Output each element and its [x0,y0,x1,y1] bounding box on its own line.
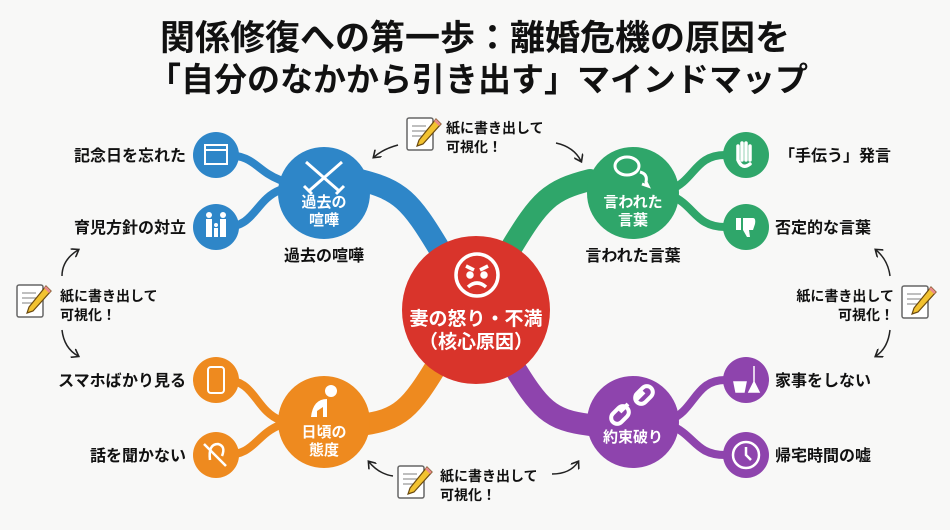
memo: left: 可視化！ [60,307,116,323]
sub-nodes: blue [193,132,239,250]
label: 言われた言葉: 言われた言葉 [585,247,681,265]
node: 言われた言葉: 言葉 [618,212,648,229]
leaf labels: 帰宅時間の嘘 [775,446,871,465]
memo: left [17,250,158,356]
node: 約束破り: 約束破り [603,428,663,446]
memo: left: 紙に書き出して [60,288,158,304]
leaf labels: 家事をしない [775,371,871,390]
sub-nodes: orange [193,357,239,478]
center node [402,236,550,384]
memo: bottom: 可視化！ [440,487,496,503]
icon: slouching person [311,385,337,417]
leaf labels: スマホばかり見る [58,372,186,390]
memo: top: 紙に書き出して [446,120,544,136]
node: 日頃の態度 [278,376,370,468]
leaf labels: 話を聞かない [90,447,186,465]
title: 「自分のなかから引き出す」マインドマップ [148,61,808,98]
memo: bottom [369,462,578,503]
node: 日頃の態度: 態度 [309,441,339,459]
node: 約束破り [587,376,679,468]
icon: speech bubbles [615,157,648,186]
node: 日頃の態度: 日頃の [301,424,347,441]
memo: top [374,118,581,161]
icon: angry face [456,254,498,296]
title: 関係修復への第一歩：離婚危機の原因を [160,19,790,58]
icon: broken chain [609,384,655,426]
branches [225,155,725,455]
memo: top: 可視化！ [446,139,502,155]
label: 過去の喧嘩: 過去の喧嘩 [284,246,364,265]
node: 過去の喧嘩: 喧嘩 [309,211,339,229]
leaf labels: 記念日を忘れた [74,147,186,165]
node: 言われた言葉: 言われた [603,194,663,211]
leaf labels: 「手伝う」発言 [779,146,891,165]
center node: （核心原因） [419,331,533,353]
leaf labels [58,146,891,465]
node: 過去の喧嘩 [278,147,370,239]
memo: right: 可視化！ [838,307,894,323]
node: 言われた言葉 [587,147,679,239]
memo: right [796,250,936,356]
memo: bottom: 紙に書き出して [440,468,538,484]
icon: swords [304,162,344,194]
center node: 妻の怒り・不満 [409,308,543,330]
sub-nodes: green [723,132,769,250]
leaf labels: 育児方針の対立 [74,218,186,237]
title [148,19,808,98]
sub-nodes: purple [723,357,769,478]
leaf labels: 否定的な言葉 [775,219,871,237]
memo: right: 紙に書き出して [796,288,894,304]
node: 過去の喧嘩: 過去の [301,194,347,211]
